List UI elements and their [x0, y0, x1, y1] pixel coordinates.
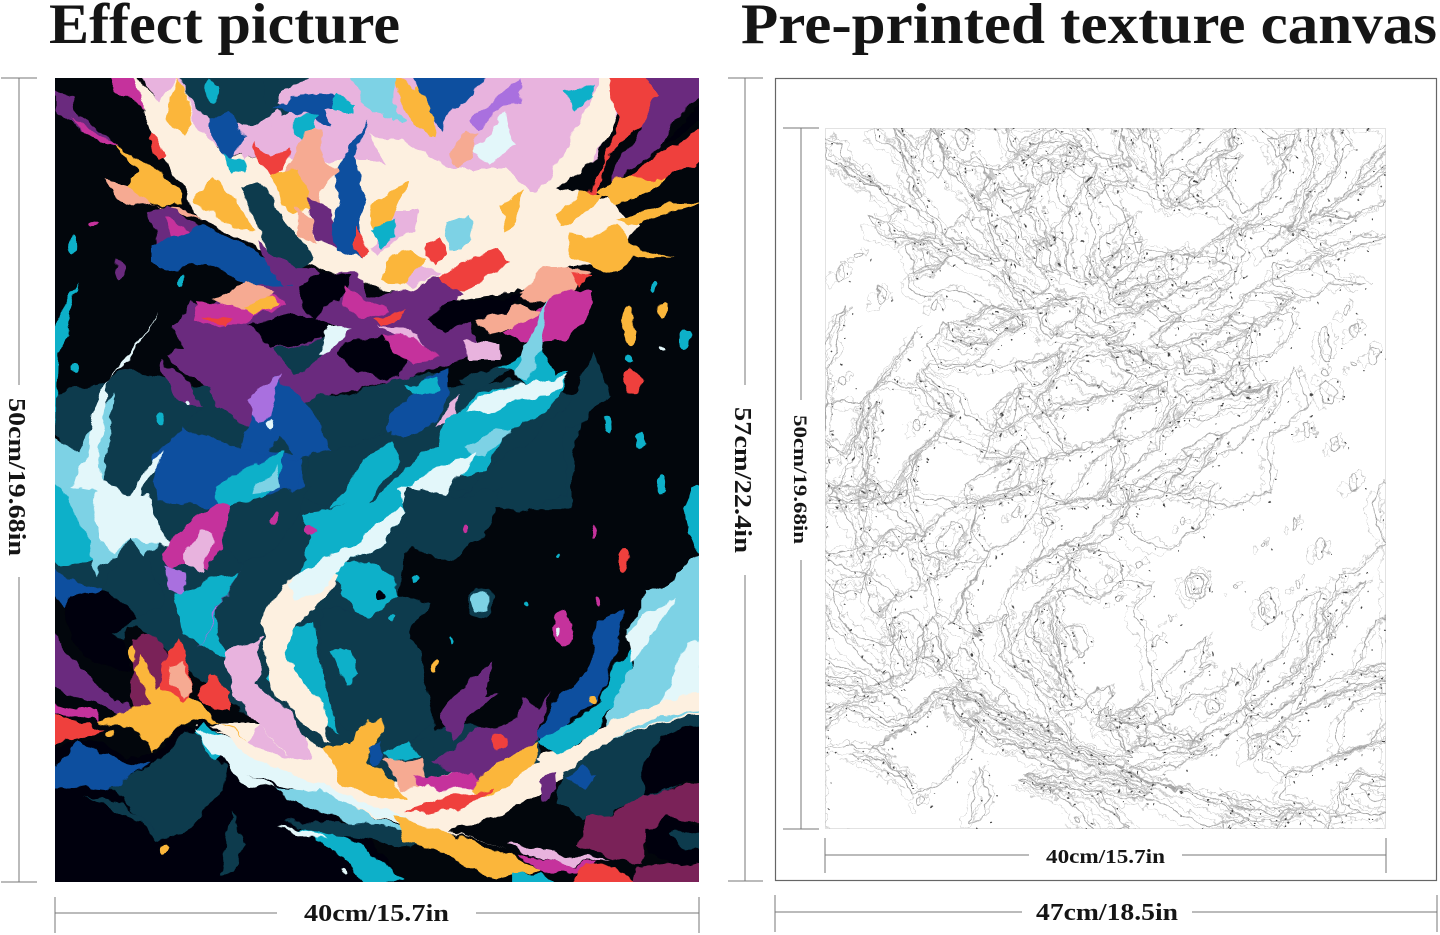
painting: colourful abstract explosion	[51, 73, 702, 895]
height dimension: full canvas: 57cm/22.4in	[729, 407, 755, 553]
width dimension: printed area	[825, 838, 1386, 873]
canvas frame	[776, 78, 1436, 880]
line art: numbered paint-by-numbers outlines	[813, 120, 1397, 846]
height dimension: effect picture: 50cm/19.68in	[3, 398, 29, 556]
width dimension: full canvas	[775, 895, 1437, 932]
width dimension: printed area: 40cm/15.7in	[1046, 846, 1165, 868]
height dimension: printed area: 50cm/19.68in	[789, 415, 810, 545]
width dimension: effect picture	[55, 897, 699, 933]
height dimension: full canvas	[728, 78, 763, 881]
width dimension: full canvas: 47cm/18.5in	[1036, 900, 1178, 926]
width dimension: effect picture: 40cm/15.7in	[304, 901, 449, 927]
height dimension: printed area	[783, 128, 819, 829]
height dimension: effect picture	[1, 78, 37, 882]
